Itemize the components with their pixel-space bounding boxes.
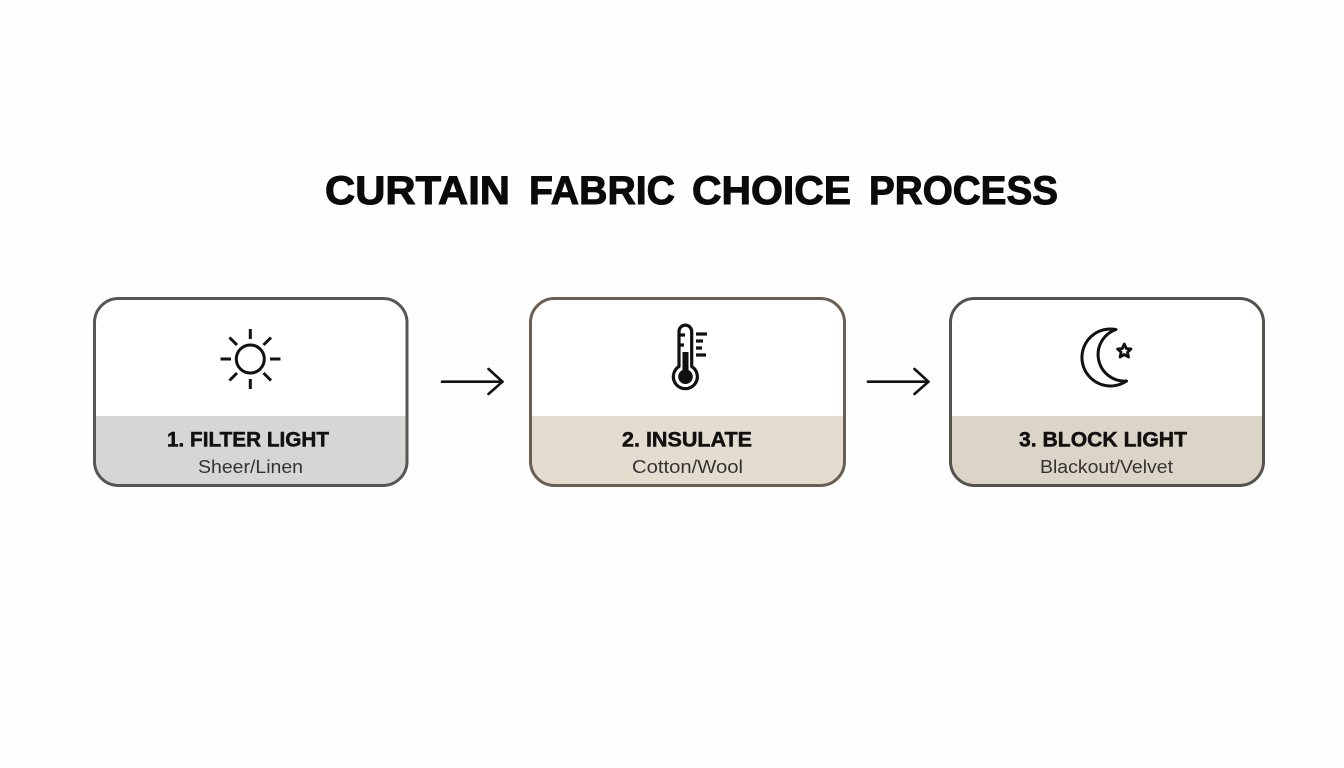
title: FABRIC xyxy=(529,169,675,213)
heading: step 3: 3. BLOCK LIGHT xyxy=(1019,428,1187,452)
panel: step 2 insulate xyxy=(530,298,845,486)
subtext: step 3: Blackout/Velvet xyxy=(1040,457,1173,477)
heading: step 1: 1. FILTER LIGHT xyxy=(167,428,329,452)
title: CURTAIN xyxy=(325,169,510,213)
title: CHOICE xyxy=(692,169,851,213)
icon: moon and star xyxy=(1082,329,1131,386)
label band: step 2 xyxy=(530,416,845,486)
subtext: step 1: Sheer/Linen xyxy=(198,457,303,477)
label band: step 3 xyxy=(950,416,1265,486)
label band: step 1 xyxy=(94,416,408,486)
icon: thermometer xyxy=(673,325,707,389)
title: PROCESS xyxy=(869,169,1058,213)
arrow: step 2 to step 3 xyxy=(868,369,928,394)
icon: sun xyxy=(220,329,280,389)
arrow: step 1 to step 2 xyxy=(442,369,502,394)
title xyxy=(325,169,1058,213)
panel: step 1 filter light xyxy=(94,298,408,486)
heading: step 2: 2. INSULATE xyxy=(622,428,752,452)
panel: step 3 block light xyxy=(950,298,1265,486)
subtext: step 2: Cotton/Wool xyxy=(632,457,743,477)
